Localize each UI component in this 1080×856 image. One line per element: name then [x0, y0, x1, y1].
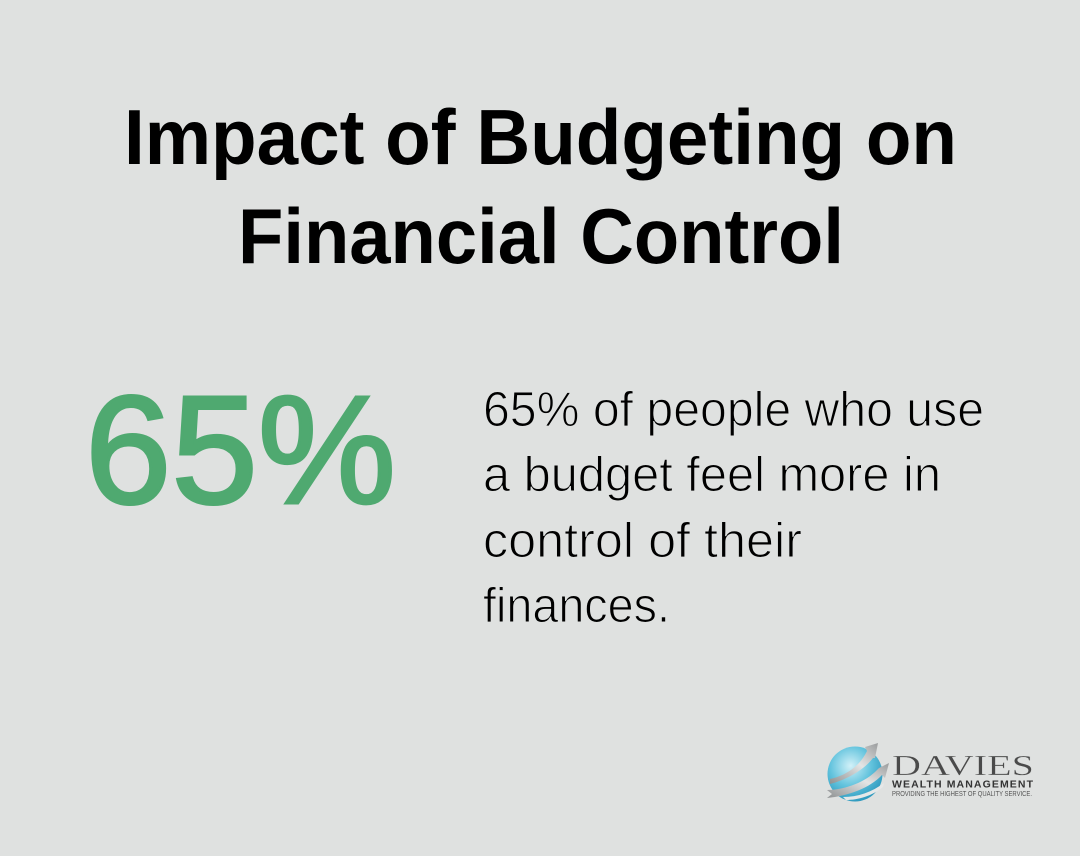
logo tagline: PROVIDING THE HIGHEST OF QUALITY SERVICE.: [892, 791, 1032, 798]
description text: [483, 383, 984, 633]
title: Financial Control: [238, 192, 844, 280]
logo wordmark: DAVIES: [892, 751, 1034, 782]
logo: Davies Wealth Management: [827, 743, 1034, 802]
icon: globe with arrows: [827, 743, 889, 802]
description text: a budget feel more in: [483, 448, 941, 502]
description text: 65% of people who use: [483, 383, 984, 437]
logo subtitle: WEALTH MANAGEMENT: [892, 778, 1034, 790]
description text: control of their: [483, 514, 802, 568]
title: [124, 93, 957, 280]
description text: finances.: [483, 579, 670, 633]
big statistic: 65%: 65%: [85, 364, 396, 536]
title: Impact of Budgeting on: [124, 93, 957, 181]
